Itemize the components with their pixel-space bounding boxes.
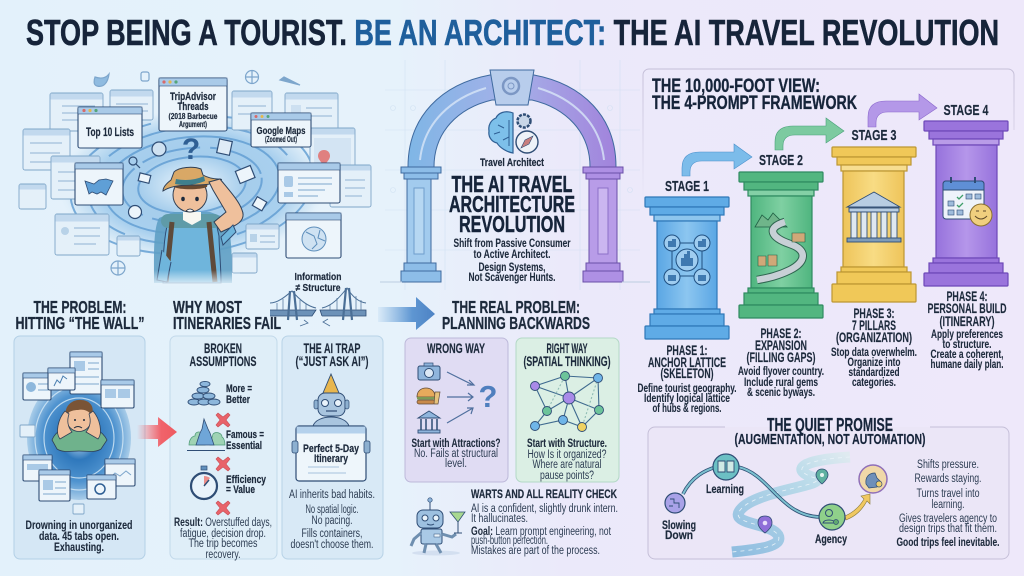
heading: the problem [16,297,144,333]
window: TripAdvisor Threads: (2018 Barbecue [168,111,218,121]
text: result: fatigue, decision drop. [180,528,266,540]
stage 2 column: STAGE 2 [759,152,803,169]
text: start with attractions [412,438,500,470]
stage 3 text: categories. [852,377,896,389]
arch: travel architect [380,70,650,284]
icon: robot with dunce cap and sign [292,374,370,481]
text: warts and all reality check: WARTS AND ALL REALITY CHECK [471,489,618,501]
pillar: blue [645,197,729,339]
text: AI inherits bad habits: AI inherits bad habits. [289,489,375,501]
arrow: yellow [845,494,870,520]
floating icons [94,70,300,275]
icon: brain, gear and compass [489,112,538,153]
stage 1 text [638,343,736,415]
text: drowning: Exhausting. [54,542,104,554]
node: slowing down [662,493,696,542]
stage 2 text: (FILLING GAPS) [746,350,816,365]
stage 1 column: STAGE 1 [665,178,709,195]
drunk robot with cocktail [411,498,465,556]
heading [296,341,368,369]
node: slowing down: Down [665,530,693,542]
heading [652,76,857,114]
text: drowning [26,520,132,554]
icon: question mark: ? [182,133,200,166]
text: promises: Rewards staying. [914,473,982,485]
text: efficiency is value: Efficiency [226,474,267,486]
right pillar [583,167,623,282]
winding road [732,457,850,552]
panel: right way [516,338,619,482]
window: Google Maps [251,113,311,147]
text: start with structure: pause points? [540,470,594,482]
text: famous is essential: Essential [226,440,262,452]
stage 2 text: Include rural gems [744,377,818,389]
window: map pin [318,150,330,165]
window: Top 10 Lists: Top 10 Lists [86,127,134,139]
text: start with structure [527,438,607,482]
heading: (“JUST ASK AI”) [296,354,368,369]
heading: why most itineraries fail: ITINERARIES FAIL [173,313,281,333]
heading: THE QUIET PROMISE [767,415,893,435]
heading: the problem: THE PROBLEM: [34,297,126,317]
icon: temple with seven pillars [847,192,901,242]
stage 1 text: ANCHOR LATTICE [648,355,726,370]
text: promises: Turns travel into [916,488,980,500]
icon: red x [216,457,230,471]
window: TripAdvisor Threads: Threads [178,101,208,113]
subtitle: Shift from Passive Consumer [454,238,571,250]
panel: broken assumptions [170,336,277,561]
stage 1 text: Define tourist geography. [638,383,736,395]
text: warts and all reality check: Mistakes are part of the process. [471,545,600,557]
icon: tower [187,419,225,450]
text: efficiency is value [226,474,267,496]
node: agency: Agency [815,534,847,546]
heading: BROKEN [204,341,242,356]
faint background windows [19,90,371,273]
text: result: Result: Overstuffed days, [174,517,272,529]
pillar: green [739,172,823,318]
icon: robot with dunce cap and sign: Perfect 5-Day [303,443,360,455]
text: AI inherits bad habits [289,489,375,551]
keystone with gear [490,70,534,105]
window: Google Maps: (Zoomed Out) [265,135,297,144]
node: learning: Learning [706,484,744,496]
heading: the AI travel architecture revolution: ARCHITECTURE [449,191,575,217]
stage 3 text: 7 PILLARS [852,318,896,333]
stage 2 text: PHASE 2: [760,326,802,341]
left pillar [401,167,441,282]
text: famous is essential: Famous = [226,429,264,441]
icon: temple [418,411,440,433]
text: promises: learning. [932,499,964,511]
pillar: purple [924,121,1008,286]
tourist character [150,167,243,286]
subtitle [454,238,571,284]
stage 4 text [928,289,1007,371]
panel: the quiet promise [648,415,1009,559]
broken bridge: Information not equal to Structure: ≠ Structure [296,282,341,294]
heading: the real problem [442,297,590,333]
window: TripAdvisor Threads: TripAdvisor [170,91,217,103]
stage 2 text: & scenic byways. [747,387,815,399]
heading: the problem: HITTING “THE WALL” [16,313,144,333]
text: start with structure: How Is it organized? [528,449,606,461]
pin: teal [816,469,828,484]
stage 4 text: to structure. [942,339,992,351]
network diagram [530,372,604,432]
vortex illustration [20,352,135,514]
text: result: The trip becomes [188,538,258,550]
text: warts and all reality check: It hallucinates. [471,513,528,525]
arch curve [408,75,616,167]
heading [734,415,926,448]
text: warts and all reality check: AI is a confident, slightly drunk intern. [471,503,618,515]
stage 2 text: EXPANSION [755,338,807,353]
stage 2 text [738,326,824,399]
text: result: recovery. [206,549,240,561]
text: promises: design trips that fit them. [899,523,997,535]
stage 1 text: (SKELETON) [660,366,714,381]
stage 1 text: PHASE 1: [666,343,708,358]
panel: wrong way: WRONG WAY [427,341,485,356]
subtitle: to Active Architect. [474,249,550,261]
window: article [278,163,340,203]
stage 3 column: STAGE 3 [852,127,896,144]
stage 3 text: Organize into [848,357,900,369]
text: start with attractions: level. [445,458,467,470]
heading: THE 4-PROMPT FRAMEWORK [652,93,857,114]
icon: pile of rocks [188,381,220,405]
icon: red x [216,501,230,515]
path from slowing down to agency [683,467,820,517]
panel: right way: (SPATIAL THINKING) [524,354,610,369]
stage 4 text: PHASE 4: [946,289,988,304]
stage 4 text: (ITINERARY) [940,314,994,329]
text: promises [896,459,1000,549]
text: drowning: Drowning in unorganized [26,520,132,532]
icon: calendar and smiley [943,177,992,226]
heading: the AI travel architecture revolution [449,171,575,237]
window: USA map [75,163,123,205]
stage 3 text [831,306,917,389]
node: destination [859,465,887,493]
heading: the real problem: THE REAL PROBLEM: [452,297,580,317]
arrow: stage 1 to stage 2 [682,144,752,176]
text: drowning: data. 45 tabs open. [39,531,119,543]
icon: burger and drink [417,388,440,404]
distressed traveler [52,400,107,452]
text: AI inherits bad habits: No spatial logic. [306,504,358,516]
icon: robot with dunce cap and sign: Itinerary [314,453,349,465]
heading: the AI travel architecture revolution: REVOLUTION [459,211,565,237]
text: efficiency is value: = Value [226,484,255,496]
stage 3 text: (ORGANIZATION) [836,330,912,345]
stage 4 column [924,102,1008,286]
panel: the problem [14,336,145,559]
stage 1 text: of hubs & regions. [652,403,722,415]
window: Google Maps: Google Maps [256,125,306,137]
panel: 10,000-foot view framework [638,69,1014,415]
text: result [174,517,272,561]
pillar: yellow [832,147,916,302]
stage 1 text: Identify logical lattice [644,393,730,405]
panel: right way: RIGHT WAY [546,341,588,356]
window: globe [286,213,341,258]
subtitle: Not Scavenger Hunts. [468,272,556,284]
text: more is better: More = [226,383,252,395]
heading: (AUGMENTATION, NOT AUTOMATION) [734,431,926,448]
panel: wrong way [405,338,508,482]
swirl of information [57,105,327,265]
stage 3 column [832,127,916,302]
arrow: stage 3 to stage 4 [868,94,937,127]
text: AI inherits bad habits: No pacing. [312,515,352,527]
text: more is better [226,383,252,406]
arrow: stage 2 to stage 3 [775,118,844,150]
text: promises: Shifts pressure. [917,459,979,471]
text: warts and all reality check: push-button perfection. [471,535,548,547]
text: AI inherits bad habits: Fills containers, [302,528,362,540]
window: Top 10 Lists [78,107,142,148]
text: famous is essential [226,429,264,452]
heading: THE AI TRAP [304,341,360,356]
node: agency [815,504,847,546]
window: TripAdvisor Threads: Argument) [179,119,207,129]
arrows to question mark [447,372,474,423]
icon: winding road and mountains [755,213,805,280]
heading: ASSUMPTIONS [190,354,256,369]
stage 4 column: STAGE 4 [944,102,989,119]
stage 3 text: standardized [848,367,900,379]
scene: tourist overwhelmed by browser tabs [19,70,371,286]
heading: THE 10,000-FOOT VIEW: [652,76,820,97]
heading: why most itineraries fail: WHY MOST [173,297,242,317]
text: more is better: Better [226,394,251,406]
stage 2 column [739,152,823,318]
stage 3 text: PHASE 3: [854,306,894,321]
subtitle: Design Systems, [478,262,546,274]
text: start with attractions: Start with Attractions? [412,438,500,450]
icon: camera [418,363,440,380]
pin: purple [758,516,772,533]
text: start with structure: Start with Structure. [527,438,607,450]
heading: why most itineraries fail [173,297,281,333]
panel: the AI trap [282,336,383,559]
window: TripAdvisor Threads [159,78,227,131]
question mark: ? [479,379,497,414]
broken bridge: Information not equal to Structure [270,271,366,326]
stage 3 text: Stop data overwhelm. [831,347,917,359]
icon: stopwatch [191,466,217,499]
broken bridge: Information not equal to Structure: Information [294,271,342,283]
heading: the AI travel architecture revolution: THE AI TRAVEL [452,171,572,197]
stage 1 column [645,178,729,339]
arrow: red [137,417,177,447]
icon: anchor lattice [664,235,710,285]
arrow: big blue [378,297,435,330]
stage 2 text: Avoid flyover country. [738,366,824,378]
heading: the real problem: PLANNING BACKWARDS [442,313,590,333]
text: warts and all reality check: Goal: Learn prompt engineering, not [471,526,612,538]
text: start with attractions: No. Fails at structural [414,448,498,460]
arch: travel architect: Travel Architect [480,157,544,169]
node: learning [706,454,744,496]
heading [190,341,256,369]
icon: red x [216,413,230,427]
text: start with structure: Where are natural [532,459,602,471]
text: AI inherits bad habits: doesn't choose them. [290,539,374,551]
text: warts and all reality check [471,489,618,557]
node: slowing down: Slowing [662,520,696,532]
